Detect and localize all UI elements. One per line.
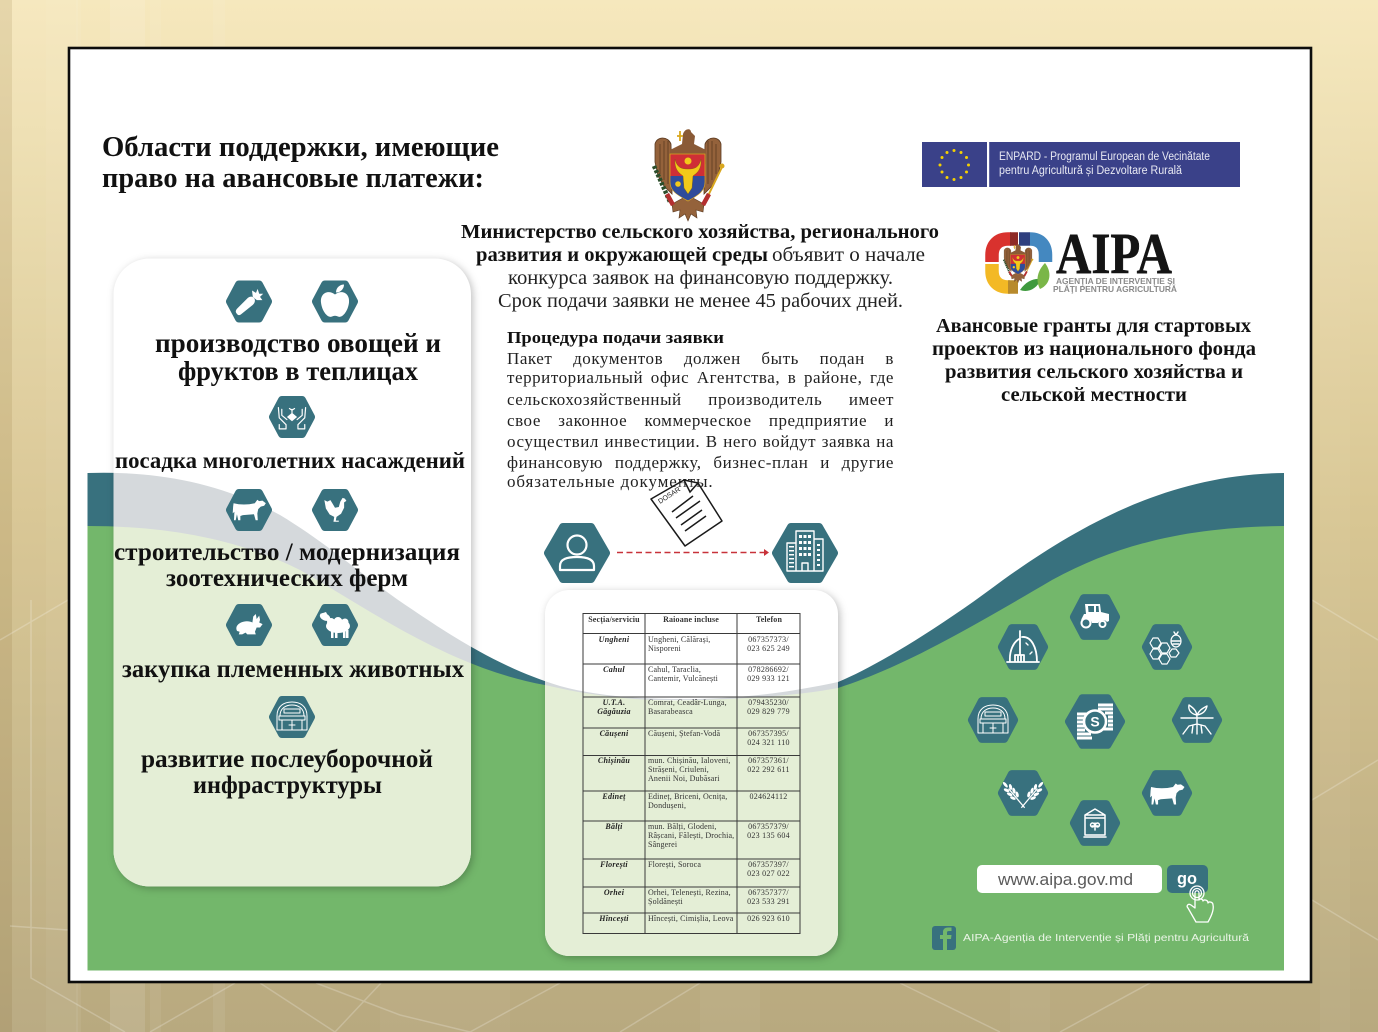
icon: haystack with pitchfork [1002, 628, 1044, 666]
table: regional offices: Telefon [756, 615, 782, 624]
text: vegetables and fruits: производство овощей и [155, 328, 441, 358]
heading: ministry announcement [461, 221, 939, 312]
table: regional offices: Nisporeni [648, 644, 682, 653]
table: regional offices: Căușeni [600, 729, 629, 738]
heading: advance grants [932, 315, 1256, 406]
table: regional offices: 024 321 110 [747, 738, 790, 747]
icon: coat of arms of Moldova [654, 129, 724, 221]
table: regional offices: 078286692/ [748, 665, 789, 674]
text: farm construction [114, 539, 460, 592]
table: regional offices: 023 533 291 [747, 897, 790, 906]
text block: procedure description: сельскохозяйственный производитель имеет [507, 390, 894, 409]
table: regional offices: 067357397/ [748, 860, 789, 869]
icon: tractor [1074, 598, 1116, 636]
table: regional offices: Ungheni [599, 635, 630, 644]
table: regional offices: Bălți [604, 822, 623, 831]
title: Области поддержки, имеющие [102, 131, 499, 163]
text: post-harvest infrastructure: развитие послеуборочной [141, 746, 433, 773]
table: regional offices: Râșcani, Fălești, Drochia, [648, 831, 734, 840]
table: regional offices: 067357377/ [748, 888, 789, 897]
logo: ENPARD banner: pentru Agricultură și Dezvoltare Rurală [999, 165, 1183, 177]
table: regional offices: Hîncești [598, 914, 629, 923]
heading: ministry announcement: развития и окружающей среды [476, 244, 768, 266]
logo: AIPA: AIPA [1056, 221, 1172, 286]
icon: seedling with roots [1176, 701, 1218, 739]
table: regional offices: mun. Bălți, Glodeni, [648, 822, 717, 831]
icon: facebook [932, 926, 956, 950]
icon: dossier document [651, 480, 722, 546]
text: vegetables and fruits [155, 328, 441, 386]
heading: ministry announcement: Срок подачи заявки не менее 45 рабочих дней. [498, 290, 903, 312]
text block: procedure description: Пакет документов должен быть подан в [507, 349, 894, 368]
icon: office building [776, 527, 834, 579]
icon: pointing hand [1187, 886, 1213, 922]
table: regional offices: Secția/serviciu [588, 615, 640, 624]
table: regional offices: Găgăuzia [597, 707, 631, 716]
icon: storage building [273, 700, 311, 734]
icon: carrot [230, 284, 268, 318]
table: regional offices: Hîncești, Cimișlia, Leova [648, 914, 734, 923]
table: regional offices: Dondușeni, [648, 801, 686, 810]
text: vegetables and fruits: фруктов в теплицах [178, 356, 418, 386]
table: regional offices: 067357361/ [748, 756, 789, 765]
table: regional offices: Cantemir, Vulcănești [648, 674, 719, 683]
table: regional offices: Cahul, Taraclia, [648, 665, 701, 674]
icon: sheep [316, 608, 354, 642]
arrow: submission route [617, 549, 769, 556]
website field: www.aipa.gov.md [997, 870, 1133, 889]
text: facebook page name: AIPA-Agenția de Intervenție și Plăți pentru Agricultură [963, 932, 1249, 944]
panel: support areas card [114, 258, 471, 886]
icon: coins: S [1090, 714, 1100, 730]
text block: procedure description: свое законное коммерческое предприятие и [507, 411, 894, 430]
table: regional offices: Cahul [603, 665, 625, 674]
table: regional offices: Chișinău [598, 756, 630, 765]
icon: hands with plant [273, 400, 311, 434]
table: regional offices: 029 829 779 [747, 707, 790, 716]
text block: procedure description: финансовую поддержку, бизнес-план и другие [507, 453, 894, 472]
table: regional offices: Florești [599, 860, 628, 869]
table: regional offices: 023 027 022 [747, 869, 790, 878]
text: post-harvest infrastructure: инфраструктуры [193, 772, 382, 799]
logo: AIPA [992, 221, 1177, 294]
table: regional offices: Anenii Noi, Dubăsari [648, 774, 720, 783]
icon: rooster [316, 493, 354, 527]
table: regional offices [583, 614, 800, 934]
logo: ENPARD banner: ENPARD - Programul European de Vecinătate [999, 151, 1210, 163]
table: regional offices: U.T.A. [603, 698, 625, 707]
table: regional offices: Orhei, Telenești, Rezina, [648, 888, 731, 897]
text: farm construction: зоотехнических ферм [166, 565, 408, 592]
text block: procedure description: обязательные документы. [507, 472, 714, 491]
icon: person [548, 527, 606, 579]
title [102, 131, 499, 194]
logo: AIPA: PLĂŢI PENTRU AGRICULTURĂ [1053, 284, 1177, 294]
table: regional offices: Strășeni, Criuleni, [648, 765, 709, 774]
panel: table card [545, 590, 838, 956]
icon: coins [1069, 698, 1121, 745]
heading: ministry announcement: Министерство сельского хозяйства, регионального [461, 221, 939, 243]
table: regional offices: Orhei [604, 888, 625, 897]
table: regional offices: 079435230/ [748, 698, 789, 707]
table: regional offices: 023 135 604 [747, 831, 790, 840]
table: regional offices: Edineț [601, 792, 626, 801]
heading: advance grants: развития сельского хозяйства и [945, 361, 1243, 383]
table: regional offices: Edineț, Briceni, Ocnița, [648, 792, 727, 801]
table: regional offices: Sângerei [648, 840, 678, 849]
table: regional offices: 029 933 121 [747, 674, 790, 683]
heading: ministry announcement: объявит о начале [772, 244, 925, 266]
translucent wave inside cards [114, 472, 838, 956]
heading: advance grants: сельской местности [1001, 384, 1187, 406]
green field [88, 526, 1284, 970]
subheading: procedure: Процедура подачи заявки [507, 328, 724, 347]
icon: grain sack [1074, 804, 1116, 842]
icon: cow large [1146, 774, 1188, 812]
text block: procedure description: территориальный офис Агентства, в районе, где [507, 368, 894, 387]
text: farm construction: строительство / модернизация [114, 539, 460, 566]
go button: go [1177, 869, 1197, 888]
teal wave band [88, 473, 1284, 700]
icon: honeycomb with bee [1146, 628, 1188, 666]
table: regional offices: Raioane incluse [663, 615, 719, 624]
table: regional offices: Basarabeasca [648, 707, 693, 716]
table: regional offices: Căușeni, Ștefan-Vodă [648, 729, 720, 738]
icon: rabbit [230, 608, 268, 642]
heading: ministry announcement: конкурса заявок на финансовую поддержку. [508, 267, 893, 289]
heading: advance grants: проектов из национального фонда [932, 338, 1256, 360]
icon: dossier document: DOSAR [657, 486, 682, 506]
table: regional offices: 026 923 610 [747, 914, 790, 923]
logo: ENPARD banner [922, 142, 1240, 187]
table: regional offices: Ungheni, Călărași, [648, 635, 710, 644]
text block: procedure description [507, 349, 894, 491]
logo: AIPA: AGENŢIA DE INTERVENŢIE ŞI [1056, 276, 1175, 286]
table: regional offices: 024624112 [750, 792, 787, 801]
go button [1167, 865, 1208, 893]
heading: advance grants: Авансовые гранты для стартовых [936, 315, 1251, 337]
icon: storage barn [972, 701, 1014, 739]
table: regional offices: 022 292 611 [747, 765, 790, 774]
text: breeding animals: закупка племенных животных [122, 656, 464, 683]
icon: wheat [999, 774, 1047, 812]
website field [977, 865, 1162, 893]
icon: cow [230, 493, 268, 527]
table: regional offices: 067357379/ [748, 822, 789, 831]
table: regional offices: 067357395/ [748, 729, 789, 738]
table: regional offices: Florești, Soroca [648, 860, 701, 869]
text: post-harvest infrastructure [141, 746, 433, 799]
table: regional offices: 023 625 249 [747, 644, 790, 653]
text: perennial plantings: посадка многолетних насаждений [115, 448, 465, 473]
table: regional offices: 067357373/ [748, 635, 789, 644]
icon: apple [316, 284, 354, 318]
title: право на авансовые платежи: [102, 162, 484, 194]
table: regional offices: Comrat, Ceadâr-Lunga, [648, 698, 727, 707]
text block: procedure description: осуществил инвестиции. В него войдут заявка на [507, 432, 894, 451]
table: regional offices: mun. Chișinău, Ialoveni, [648, 756, 730, 765]
table: regional offices: Șoldănești [648, 897, 683, 906]
